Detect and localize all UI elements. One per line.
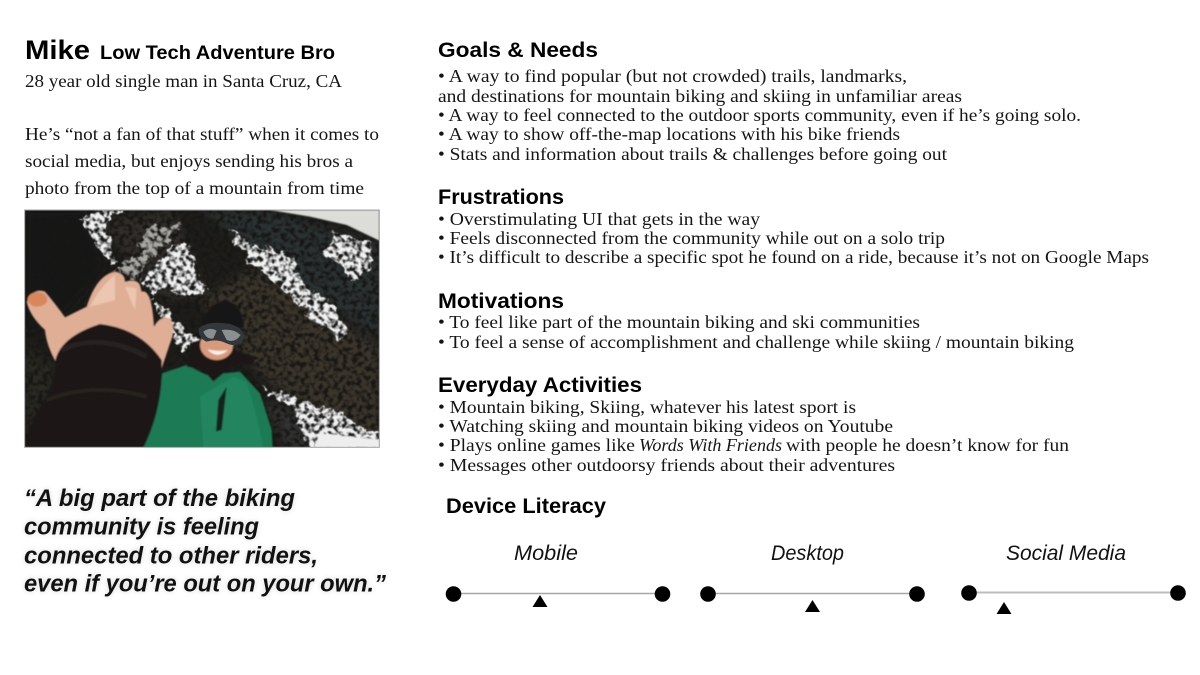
heading: everyday activities: Everyday Activities — [438, 374, 642, 397]
list: motivations: • To feel a sense of accomplishment and challenge while skiing / mountain biking — [438, 332, 1074, 352]
bio text: photo from the top of a mountain from time — [25, 178, 364, 198]
list: frustrations: • It’s difficult to describe a specific spot he found on a ride, because it’s not on Google Maps — [438, 247, 1149, 267]
list: frustrations — [438, 209, 1149, 267]
list: activities — [438, 397, 1069, 475]
demographic line: 28 year old single man in Santa Cruz, CA — [25, 71, 342, 91]
scale: social media — [961, 542, 1186, 614]
heading: motivations: Motivations — [438, 290, 564, 313]
scale: desktop — [700, 542, 925, 612]
list: activities: Words With Friends — [639, 435, 782, 455]
scale: mobile — [446, 542, 670, 607]
bio text: He’s “not a fan of that stuff” when it comes to — [25, 124, 379, 144]
bio text: social media, but enjoys sending his bros a — [25, 151, 353, 171]
panel: profile — [24, 35, 386, 598]
scale: mobile: Mobile — [514, 542, 578, 565]
list: goals: • Stats and information about trails & challenges before going out — [438, 144, 947, 164]
list: goals: and destinations for mountain biking and skiing in unfamiliar areas — [438, 86, 962, 106]
quote: community is feeling — [24, 514, 259, 540]
quote: connected to other riders, — [24, 542, 318, 570]
photo: high five on a snowy mountain — [25, 208, 383, 453]
rider — [142, 301, 273, 447]
quote — [24, 485, 386, 598]
heading: goals and needs: Goals & Needs — [438, 39, 598, 62]
quote: community is feeling — [24, 514, 259, 540]
list: goals — [438, 66, 1081, 164]
list: activities: • Watching skiing and mountain biking videos on Youtube — [438, 416, 893, 436]
scale: social media: Social Media — [1006, 542, 1126, 565]
panel: motivations — [438, 290, 1074, 352]
heading: device literacy: Device Literacy — [446, 495, 606, 518]
list: frustrations: • Feels disconnected from the community while out on a solo trip — [438, 228, 945, 248]
scale: desktop: Desktop — [771, 542, 844, 565]
quote: even if you’re out on your own.” — [24, 570, 386, 598]
list: activities: • Plays online games like — [438, 435, 635, 455]
list: activities: • Messages other outdoorsy friends about their adventures — [438, 455, 895, 475]
bio text — [25, 124, 379, 198]
list: goals: • A way to feel connected to the outdoor sports community, even if he’s going solo. — [438, 105, 1081, 125]
list: motivations: • To feel like part of the mountain biking and ski communities — [438, 312, 920, 332]
quote: “A big part of the biking — [24, 485, 295, 512]
quote: even if you’re out on your own.” — [24, 570, 386, 598]
hand and sleeve — [25, 272, 173, 447]
quote: connected to other riders, — [24, 542, 318, 570]
panel: device literacy — [446, 495, 1186, 614]
name heading: Mike — [25, 35, 90, 65]
panel: frustrations — [438, 186, 1149, 267]
name heading — [25, 35, 335, 65]
name heading: Low Tech Adventure Bro — [100, 43, 335, 64]
list: activities: • Mountain biking, Skiing, whatever his latest sport is — [438, 397, 856, 417]
list: activities: with people he doesn’t know for fun — [786, 435, 1069, 455]
panel: everyday activities — [438, 374, 1069, 475]
panel: goals and needs — [438, 39, 1081, 164]
list: motivations — [438, 312, 1074, 352]
list: goals: • A way to find popular (but not crowded) trails, landmarks, — [438, 66, 907, 86]
list: frustrations: • Overstimulating UI that gets in the way — [438, 209, 760, 229]
heading: frustrations: Frustrations — [438, 186, 564, 209]
quote: “A big part of the biking — [24, 485, 295, 512]
list: goals: • A way to show off-the-map locations with his bike friends — [438, 124, 900, 144]
